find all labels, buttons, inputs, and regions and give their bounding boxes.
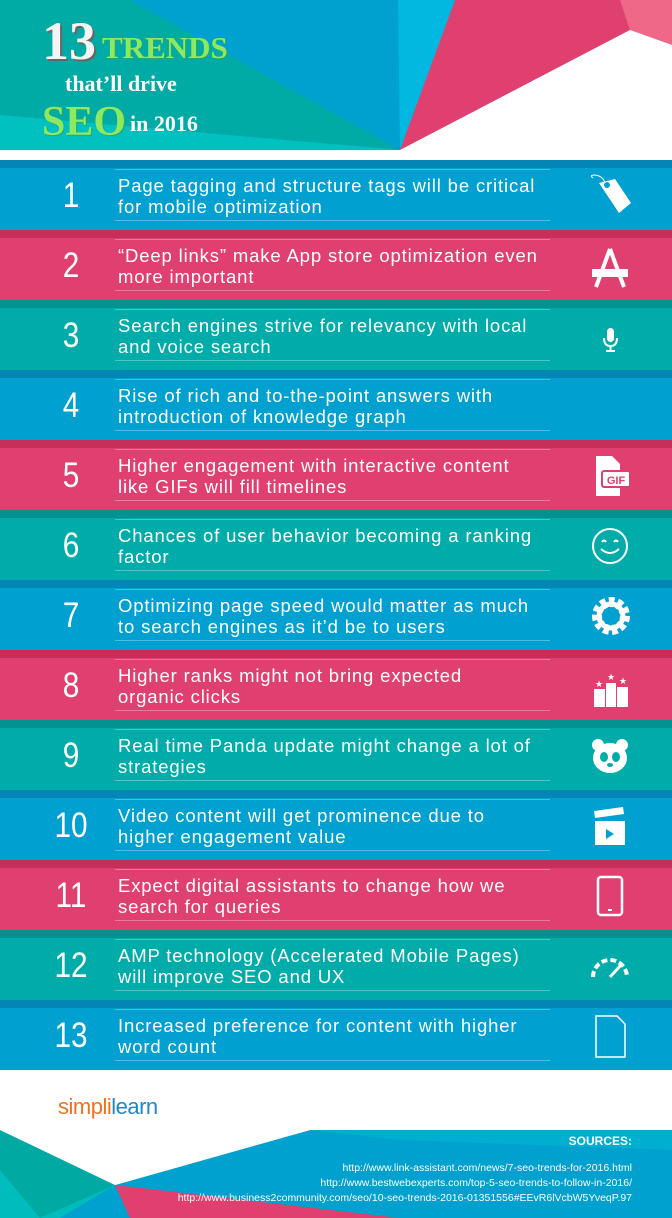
row 4: Rise of rich and to-the-point answers with: [118, 385, 493, 406]
row 13: Increased preference for content with higher: [118, 1015, 517, 1036]
row 8: organic clicks: [118, 686, 241, 707]
sources: http://www.bestwebexperts.com/top-5-seo-trends-to-follow-in-2016/: [320, 1177, 632, 1189]
row 9: strategies: [118, 756, 207, 777]
icon: document: [595, 1015, 626, 1058]
icon: clapperboard: [594, 807, 625, 845]
row 10: [0, 790, 672, 860]
row 5: [0, 440, 672, 510]
row 2: [0, 230, 672, 300]
logo: simplilearn: simplilearn: [58, 1094, 158, 1119]
row 7: 7: [63, 596, 79, 635]
row 9: [0, 720, 672, 790]
row 13: [0, 1000, 672, 1070]
sources: [178, 1134, 632, 1204]
row 12: AMP technology (Accelerated Mobile Pages): [118, 945, 520, 966]
icon: gif file: GIF: [607, 475, 625, 487]
row 8: 8: [63, 666, 79, 705]
icon: tablet: [596, 876, 624, 916]
sources: http://www.business2community.com/seo/10-seo-trends-2016-01351556#EEvR6lVcbW5YveqP.97: [178, 1192, 632, 1204]
footer background: [0, 1130, 672, 1218]
row 1: 1: [63, 176, 79, 215]
row 10: higher engagement value: [118, 826, 346, 847]
icon: ranking podium: ★: [619, 676, 627, 686]
row 9: 9: [63, 736, 79, 775]
row 5: Higher engagement with interactive content: [118, 455, 510, 476]
icon: panda: [592, 739, 628, 773]
row 11: [0, 860, 672, 930]
row 7: [0, 580, 672, 650]
row 6: [0, 510, 672, 580]
row 2: “Deep links” make App store optimization even: [118, 245, 538, 266]
row 6: 6: [63, 526, 79, 565]
row 12: 12: [54, 946, 88, 985]
row 10: 10: [54, 806, 88, 845]
row 6: Chances of user behavior becoming a ranking: [118, 525, 532, 546]
title: in 2016: [130, 111, 198, 136]
row 9: Real time Panda update might change a lot of: [118, 735, 531, 756]
icon: app store: [592, 248, 628, 288]
row 3: Search engines strive for relevancy with local: [118, 315, 527, 336]
row 1: Page tagging and structure tags will be critical: [118, 175, 535, 196]
sources: SOURCES:: [569, 1134, 632, 1148]
row 13: 13: [54, 1016, 88, 1055]
icon: tag: [590, 174, 631, 213]
title: 13: [42, 11, 96, 71]
title: [42, 11, 228, 145]
row 6: factor: [118, 546, 169, 567]
row 3: 3: [63, 316, 79, 355]
row 12: [0, 930, 672, 1000]
row 2: 2: [63, 246, 79, 285]
row 3: and voice search: [118, 336, 271, 357]
row 5: 5: [63, 456, 79, 495]
row 12: will improve SEO and UX: [118, 966, 345, 987]
row 3: [0, 300, 672, 370]
row 11: Expect digital assistants to change how we: [118, 875, 505, 896]
row 2: more important: [118, 266, 254, 287]
row 1: [0, 160, 672, 230]
row 7: to search engines as it’d be to users: [118, 616, 446, 637]
sources: http://www.link-assistant.com/news/7-seo-trends-for-2016.html: [343, 1162, 632, 1174]
icon: speedometer: [591, 958, 629, 978]
icon: ranking podium: ★: [607, 672, 615, 682]
icon: gear: [592, 597, 630, 635]
row 1: for mobile optimization: [118, 196, 323, 217]
title: SEO: [42, 99, 126, 145]
row 8: Higher ranks might not bring expected: [118, 665, 462, 686]
icon: gif file: [596, 456, 629, 496]
icon: microphone: [603, 328, 618, 352]
row 5: like GIFs will fill timelines: [118, 476, 347, 497]
icon: ranking podium: [594, 672, 628, 707]
title: that’ll drive: [65, 71, 177, 96]
icon: smiley: [592, 528, 628, 564]
row 11: 11: [56, 876, 86, 915]
title: TRENDS: [102, 30, 228, 65]
row 8: [0, 650, 672, 720]
header background: [0, 0, 672, 150]
row 13: word count: [118, 1036, 217, 1057]
row 4: introduction of knowledge graph: [118, 406, 407, 427]
row 11: search for queries: [118, 896, 281, 917]
row 4: 4: [63, 386, 79, 425]
row 7: Optimizing page speed would matter as much: [118, 595, 529, 616]
icon: ranking podium: ★: [595, 679, 603, 689]
row 4: [0, 370, 672, 440]
row 10: Video content will get prominence due to: [118, 805, 485, 826]
